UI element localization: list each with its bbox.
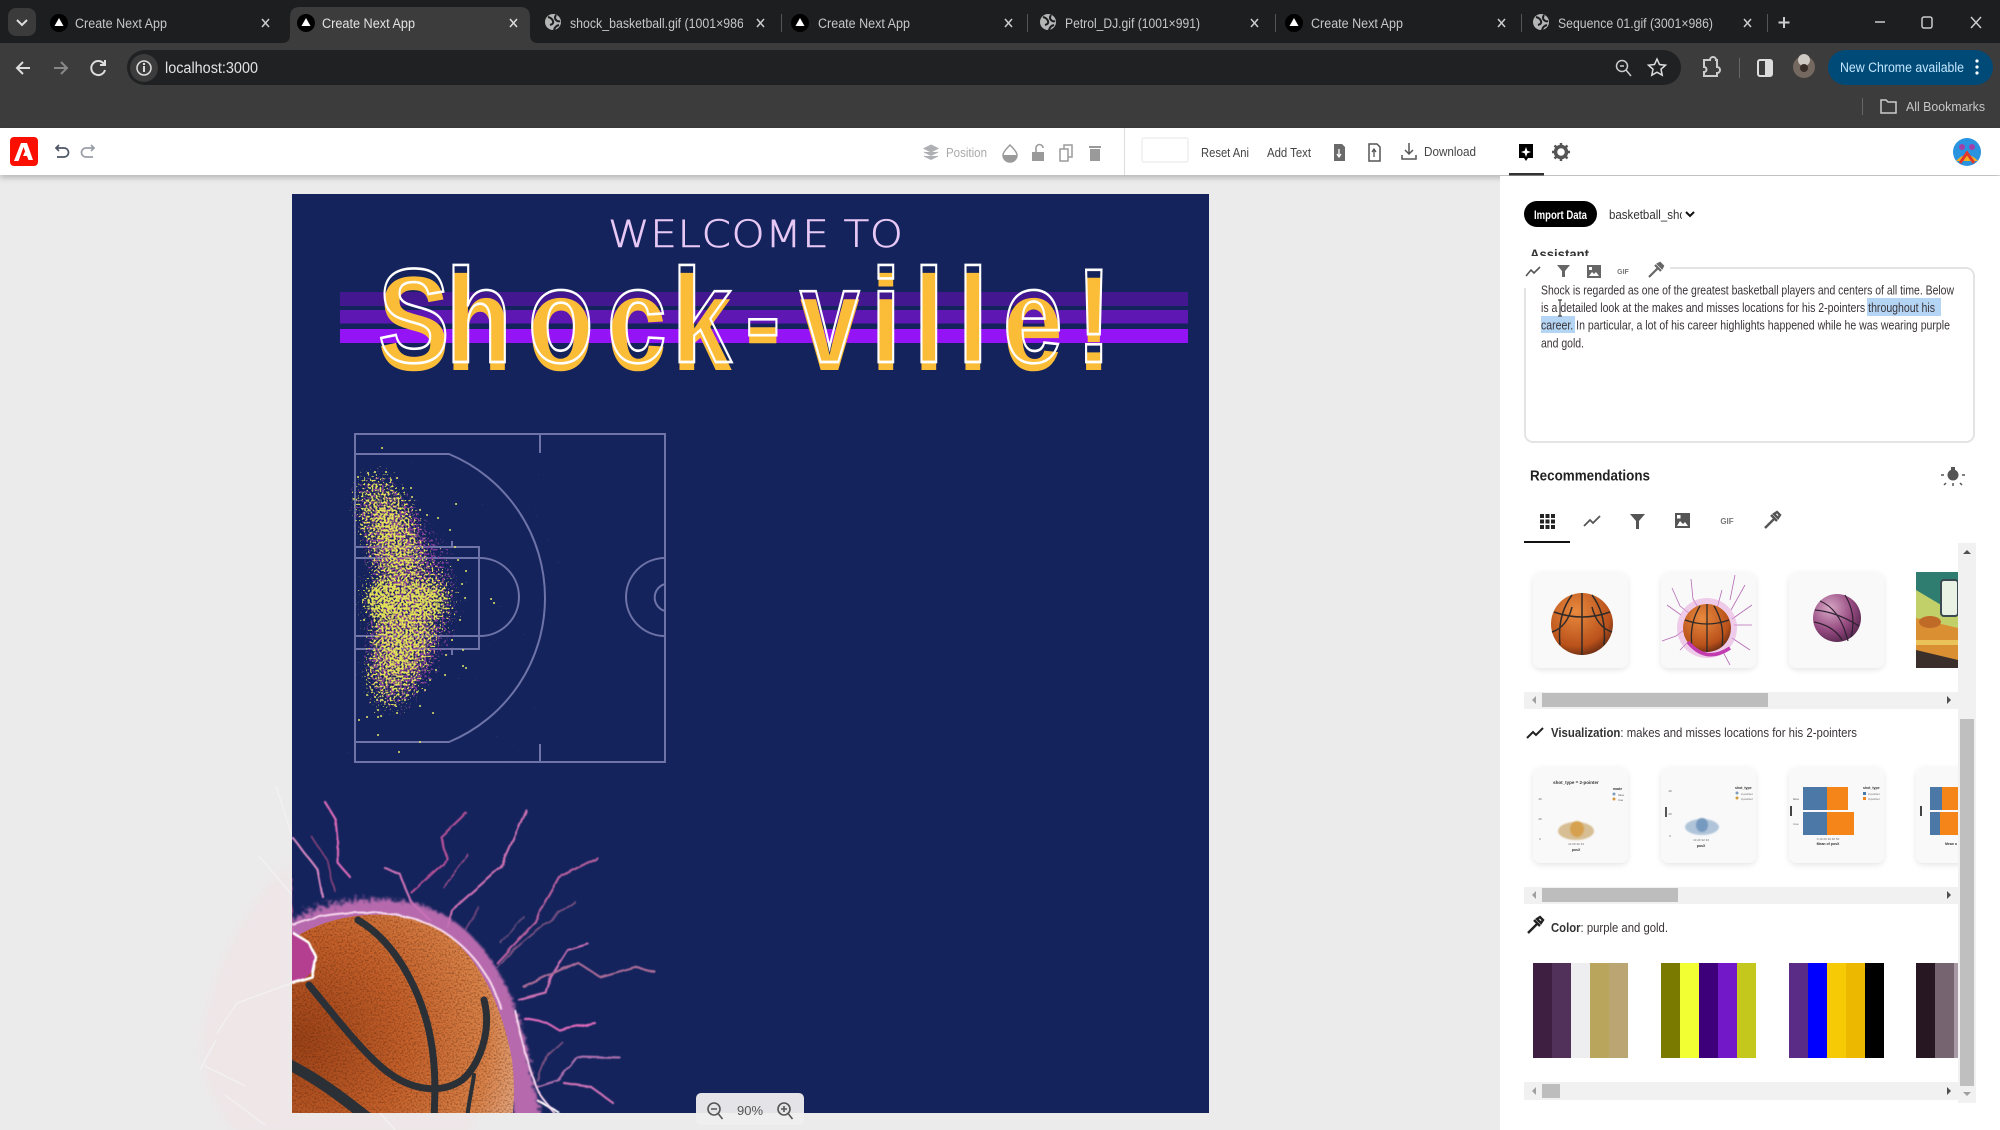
card: scatter of made shots: 20 bbox=[1538, 817, 1542, 821]
address bar: localhost:3000 bbox=[165, 60, 258, 77]
settings gear bbox=[1552, 143, 1570, 161]
card: stacked bars bbox=[1789, 767, 1884, 863]
import data button: Import Data bbox=[1534, 208, 1587, 222]
card: scatter of made shots: made bbox=[1613, 787, 1622, 791]
ball seams bbox=[288, 920, 487, 1120]
horizontal scrollbar: charts bbox=[1524, 887, 1958, 904]
vertical scrollbar bbox=[1958, 543, 1976, 1103]
assistant body text: and gold. bbox=[1541, 336, 1584, 350]
card: stacked bars: Mean of posX bbox=[1817, 842, 1840, 846]
card: scatter of made shots: 0 bbox=[1539, 837, 1541, 841]
title: Shock-ville: Shock-ville! bbox=[378, 249, 1112, 399]
import data button bbox=[1524, 201, 1597, 227]
card: stacked bars clipped: Mean o bbox=[1945, 842, 1957, 846]
image recommendations row bbox=[1533, 572, 1958, 668]
card: scatter of made shots: false bbox=[1618, 793, 1625, 797]
zoom control bbox=[696, 1093, 804, 1125]
tab: Create Next App 3: Create Next App bbox=[818, 16, 910, 31]
card: scatter by shot type: 40 bbox=[1668, 789, 1672, 793]
tab: shock_basketball.gif bbox=[545, 14, 782, 32]
tab: Sequence 01.gif bbox=[1533, 14, 1768, 32]
text cursor bbox=[1558, 300, 1562, 316]
position control bbox=[924, 145, 987, 160]
assistant text box bbox=[1520, 260, 1974, 442]
card: stacked bars: 3-pointer bbox=[1868, 797, 1880, 801]
palette 2 bbox=[1661, 963, 1756, 1058]
download button bbox=[1402, 143, 1476, 159]
card: scatter of made shots: 40 bbox=[1538, 797, 1542, 801]
tab: Sequence 01.gif: Sequence 01.gif (3001×986) bbox=[1558, 16, 1713, 31]
scattered outlying shots bbox=[354, 448, 494, 752]
layer action icons bbox=[1003, 145, 1101, 162]
heading: welcome to: WELCOME TO bbox=[608, 213, 903, 256]
undo redo bbox=[56, 145, 94, 157]
assistant tag icons: GIF bbox=[1617, 269, 1630, 276]
grid tab bbox=[1524, 514, 1570, 543]
shot dots: purple misses bbox=[326, 430, 560, 770]
card: scatter of made shots bbox=[1533, 767, 1628, 863]
application workspace background bbox=[0, 175, 1500, 1130]
recommendation category tabs: GIF bbox=[1720, 517, 1734, 526]
basketball with lightning bbox=[280, 802, 655, 1120]
horizontal scrollbar: images bbox=[1524, 692, 1958, 709]
download button: Download bbox=[1424, 144, 1476, 159]
tab: Create Next App 1: Create Next App bbox=[75, 16, 167, 31]
palette 1 bbox=[1533, 963, 1628, 1058]
shot dots: yellow makes bbox=[326, 430, 560, 770]
right panel: assistant and recommendations bbox=[1500, 176, 2000, 1130]
browser address row bbox=[0, 43, 2000, 128]
app toolbar bbox=[0, 128, 2000, 176]
navigation buttons bbox=[17, 60, 105, 75]
tab: Create Next App 1 bbox=[50, 14, 269, 32]
assistant heading: Assistant bbox=[1530, 246, 1589, 262]
card: stacked bars: shot_type bbox=[1863, 786, 1880, 790]
tab: shock_basketball.gif: shock_basketball.gif (1001×986) bbox=[570, 16, 748, 31]
recommendations heading: Recommendations bbox=[1530, 468, 1650, 484]
logo bbox=[10, 137, 38, 166]
card: scatter by shot type: 3-pointer bbox=[1741, 797, 1753, 801]
zoom control: 90% bbox=[737, 1103, 763, 1118]
recommendation category tabs bbox=[1524, 512, 1780, 543]
horizontal scrollbar: palettes bbox=[1524, 1082, 1958, 1100]
assistant tag icons bbox=[1526, 263, 1663, 278]
ball body bbox=[285, 915, 514, 1120]
magenta patch and white bolt at left edge bbox=[292, 932, 316, 984]
card: scatter of made shots: true bbox=[1618, 798, 1624, 802]
card: scatter of made shots: 13 20 32 43 bbox=[1568, 842, 1584, 846]
reset animation button: Reset Ani bbox=[1201, 145, 1249, 160]
card: basketball bbox=[1533, 572, 1628, 668]
dataset dropdown: basketball_shot bbox=[1609, 207, 1689, 222]
card: scatter by shot type: posX bbox=[1697, 844, 1706, 848]
visualization label: Visualization: makes and misses locations for his 2-pointers bbox=[1551, 725, 1857, 740]
lightbulb icon bbox=[1941, 467, 1965, 486]
browser tab strip bbox=[0, 0, 2000, 43]
card: scatter of made shots: posX bbox=[1572, 848, 1581, 852]
assistant body text bbox=[1541, 282, 1954, 350]
file icons bbox=[1334, 144, 1380, 161]
all bookmarks: All Bookmarks bbox=[1906, 99, 1985, 114]
tab: Create Next App 2 (active): Create Next App bbox=[322, 16, 415, 31]
card: scatter by shot type: 20 bbox=[1668, 812, 1672, 816]
card: scatter by shot type: 2-pointer bbox=[1741, 792, 1753, 796]
active tab bbox=[282, 7, 538, 43]
update pill bbox=[1828, 50, 1993, 85]
card: stacked bars: false bbox=[1793, 797, 1799, 801]
faint ball ghost outside canvas bbox=[200, 786, 480, 1130]
card: stacked bars: true bbox=[1793, 822, 1799, 826]
tab: Create Next App 2 (active) bbox=[297, 14, 517, 32]
assistant tab icon bbox=[1509, 144, 1544, 176]
tab: Petrol_DJ.gif: Petrol_DJ.gif (1001×991) bbox=[1065, 16, 1200, 31]
tab: Create Next App 3 bbox=[791, 14, 1028, 32]
decorative stripes bbox=[340, 292, 1188, 343]
position control: Position bbox=[946, 145, 987, 160]
add text button: Add Text bbox=[1267, 145, 1311, 160]
text highlight bbox=[1541, 298, 1941, 333]
tab: Petrol_DJ.gif bbox=[1040, 14, 1276, 32]
card: purple basketball bbox=[1789, 572, 1884, 668]
color label bbox=[1528, 917, 1668, 935]
ball rim highlight bbox=[292, 912, 502, 1010]
address bar bbox=[127, 50, 1681, 85]
lightning bolts bbox=[292, 802, 655, 1113]
card: illustrated basketball court bbox=[1916, 572, 1958, 668]
user avatar bbox=[1953, 138, 1981, 166]
card: electric basketball bbox=[1661, 572, 1756, 668]
card: scatter by shot type: shot_type bbox=[1735, 786, 1752, 790]
color palettes row bbox=[1533, 963, 1973, 1058]
card: scatter of made shots: shot_type = 2-pointer bbox=[1553, 780, 1599, 785]
extension and side panel icons bbox=[1704, 54, 1815, 78]
poster canvas bbox=[280, 194, 1209, 1120]
title: Shock-ville: Shock-ville! bbox=[378, 241, 1112, 391]
visualization recommendations row bbox=[1533, 767, 1976, 863]
card: stacked bars: 2-pointer bbox=[1868, 792, 1880, 796]
card: scatter by shot type: 0 bbox=[1669, 834, 1671, 838]
card: stacked bars: 0 10 20 30 40 50 bbox=[1817, 837, 1840, 841]
tab: Create Next App 4 bbox=[1285, 14, 1522, 32]
palette 3 bbox=[1789, 963, 1884, 1058]
colour swatch bbox=[1142, 138, 1188, 162]
update pill: New Chrome available bbox=[1840, 60, 1964, 75]
tab: Create Next App 4: Create Next App bbox=[1311, 16, 1403, 31]
leather texture bbox=[292, 914, 514, 1113]
card: scatter by shot type: 13 20 32 43 bbox=[1693, 838, 1709, 842]
all bookmarks bbox=[1862, 98, 1985, 115]
card: scatter by shot type bbox=[1661, 767, 1756, 863]
color label: Color: purple and gold. bbox=[1551, 920, 1668, 935]
new tab and window controls bbox=[1778, 17, 1981, 28]
court lines bbox=[355, 434, 665, 762]
pink electric halo bbox=[280, 912, 530, 1120]
card: stacked bars clipped bbox=[1914, 774, 1958, 866]
palette 4 bbox=[1916, 963, 1958, 1058]
basketball court shot chart bbox=[326, 430, 665, 770]
